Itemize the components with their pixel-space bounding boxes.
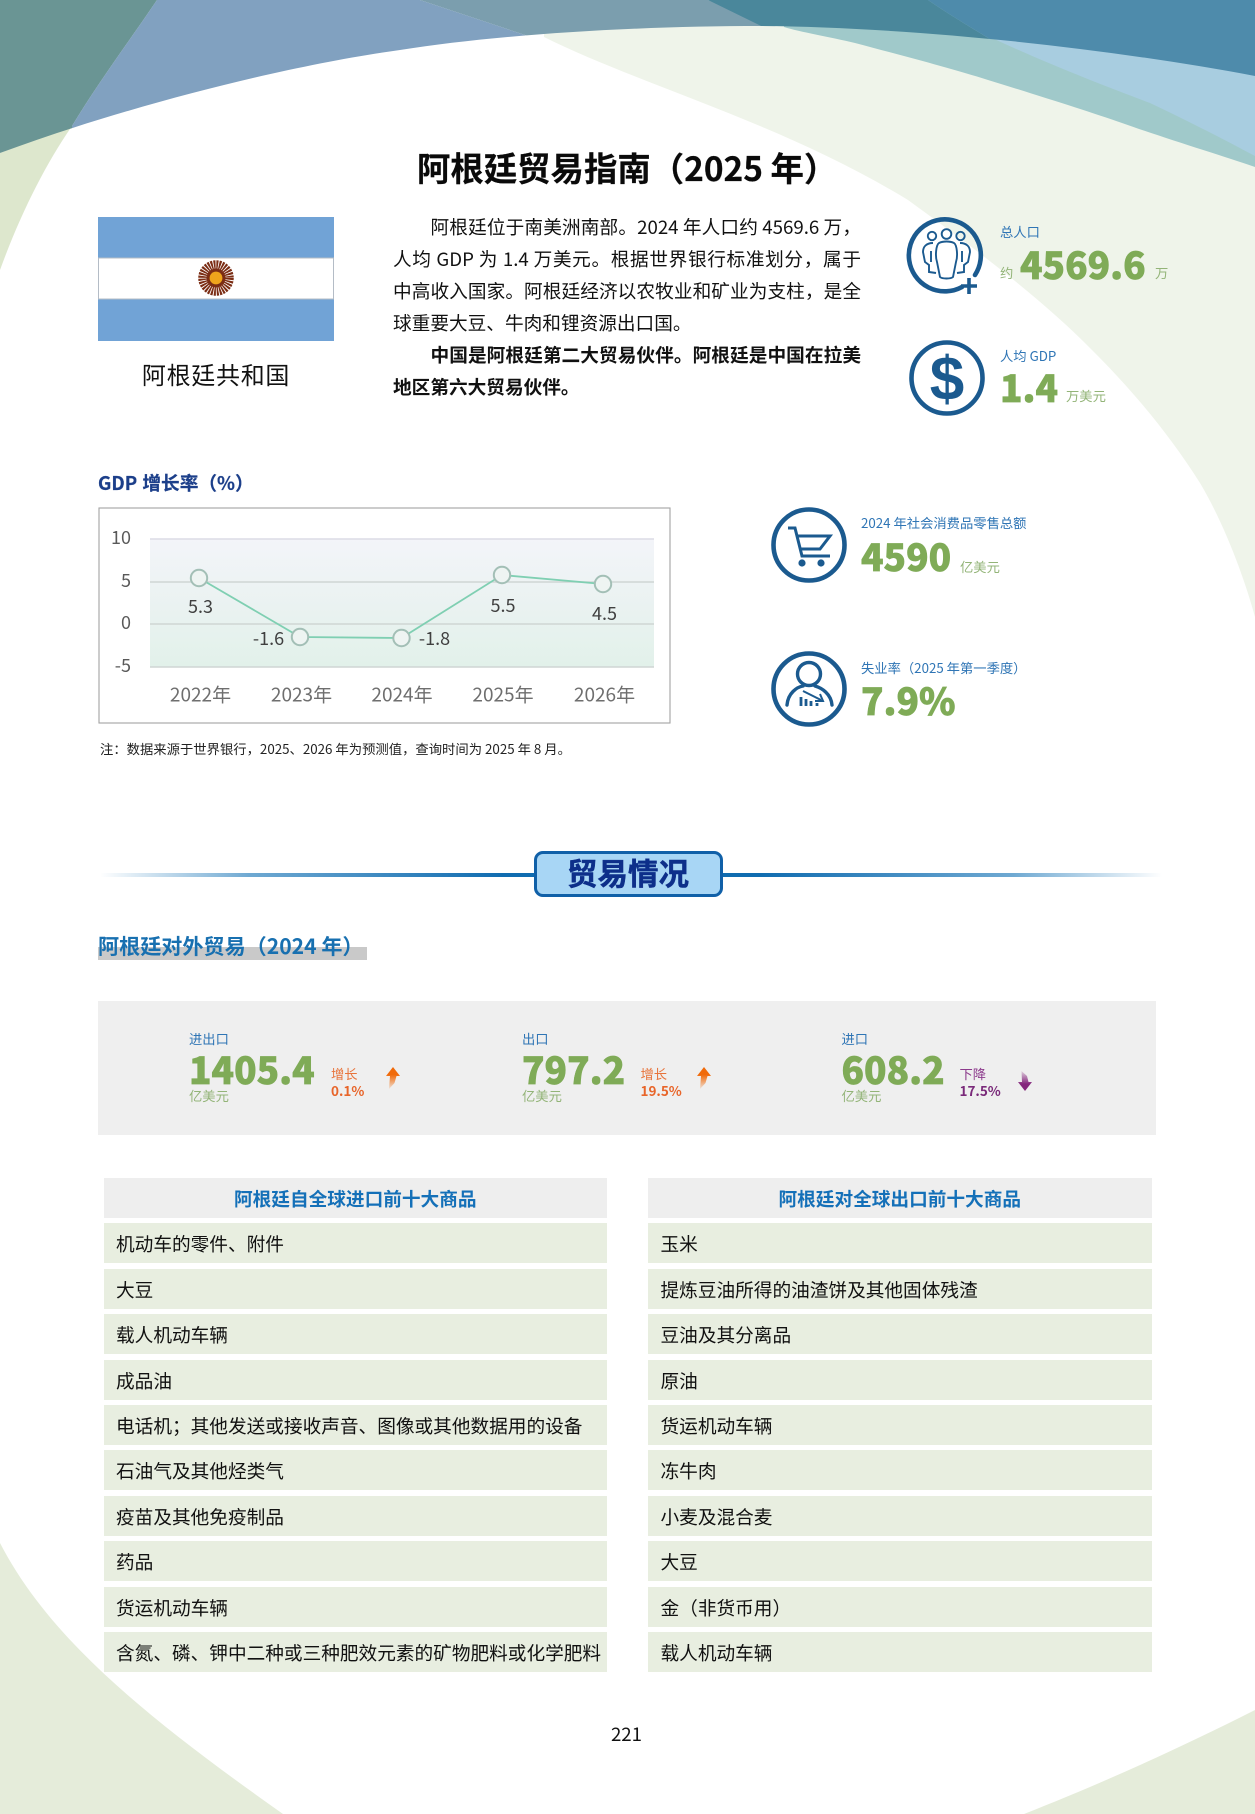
flag caption: 阿根廷共和国	[142, 356, 290, 391]
stat: exports: 出口	[522, 1029, 549, 1048]
row 8	[648, 1541, 1152, 1581]
value: 约	[1000, 262, 1013, 282]
row 8	[104, 1541, 607, 1581]
row 3: 载人机动车辆	[116, 1321, 228, 1348]
line chart: GDP growth: 0	[121, 609, 131, 635]
stat: GDP per capita	[909, 340, 1106, 416]
line chart: GDP growth: 2023年	[271, 680, 332, 708]
row 6: 石油气及其他烃类气	[116, 1457, 284, 1484]
stat: exports: 797.2	[522, 1040, 625, 1094]
line chart: GDP growth: 5.3	[188, 593, 213, 619]
line chart: GDP growth: 5	[121, 567, 131, 593]
row 4	[104, 1360, 607, 1400]
table: top ten imports	[104, 1178, 607, 1672]
row 3	[104, 1314, 607, 1354]
icon: people	[906, 217, 984, 294]
section heading: 贸易情况	[567, 850, 689, 894]
arrow: up	[697, 1067, 711, 1089]
icon: person with falling chart	[771, 651, 847, 727]
stat: total trade	[189, 1029, 400, 1105]
intro text: 中高收入国家。阿根廷经济以农牧业和矿业为支柱，是全	[393, 276, 861, 304]
intro text: 地区第六大贸易伙伴。	[393, 372, 580, 400]
row 9: 货运机动车辆	[116, 1594, 228, 1621]
row 4: 原油	[660, 1367, 698, 1394]
row 1	[104, 1223, 607, 1263]
row 6	[648, 1450, 1152, 1490]
line chart: GDP growth: 5.5	[491, 592, 516, 618]
stat: retail sales	[771, 507, 1026, 583]
section heading	[534, 851, 722, 897]
label: 2024 年社会消费品零售总额	[861, 513, 1026, 532]
row 10: 含氮、磷、钾中二种或三种肥效元素的矿物肥料或化学肥料	[116, 1639, 601, 1666]
icon: dollar	[909, 340, 985, 416]
row 8: 大豆	[660, 1548, 698, 1575]
section divider: trade situation	[108, 850, 1154, 897]
label: 人均 GDP	[1000, 346, 1056, 365]
stat: total trade: 亿美元	[189, 1086, 229, 1105]
row 5	[648, 1405, 1152, 1445]
intro text: 中国是阿根廷第二大贸易伙伴。阿根廷是中国在拉美	[430, 340, 861, 368]
row 2	[648, 1269, 1152, 1309]
value: 4590	[861, 528, 951, 582]
row 9	[104, 1587, 607, 1627]
stat: imports: 下降	[960, 1064, 986, 1083]
intro text: 球重要大豆、牛肉和锂资源出口国。	[393, 308, 692, 336]
line chart: GDP growth: -5	[115, 652, 131, 678]
value: 7.9%	[861, 672, 956, 726]
row 7: 疫苗及其他免疫制品	[116, 1503, 284, 1530]
table header	[648, 1178, 1152, 1218]
value: 万	[1155, 262, 1168, 282]
stat: total trade: 增长	[331, 1064, 358, 1083]
stat: exports: 19.5%	[640, 1080, 682, 1100]
flag of Argentina	[98, 217, 334, 341]
row 5	[104, 1405, 607, 1445]
line chart: GDP growth: 10	[111, 524, 131, 550]
line chart: GDP growth: 2025年	[472, 680, 534, 708]
stat: exports	[522, 1029, 711, 1105]
stat: total trade: 1405.4	[189, 1040, 315, 1094]
row 7: 小麦及混合麦	[660, 1503, 772, 1530]
page number: 221	[611, 1720, 642, 1747]
table: top ten exports	[648, 1178, 1152, 1672]
row 4	[648, 1360, 1152, 1400]
row 2: 提炼豆油所得的油渣饼及其他固体残渣	[660, 1276, 978, 1303]
row 7	[104, 1496, 607, 1536]
chart note: 注：数据来源于世界银行，2025、2026 年为预测值，查询时间为 2025 年 8 月。	[100, 739, 571, 758]
row 10	[648, 1632, 1152, 1672]
row 8: 药品	[116, 1548, 153, 1575]
unit: 亿美元	[960, 557, 1000, 576]
stat: imports: 608.2	[842, 1040, 945, 1094]
intro text: 阿根廷位于南美洲南部。2024 年人口约 4569.6 万，	[430, 212, 861, 240]
row 9	[648, 1587, 1152, 1627]
row 5: 货运机动车辆	[660, 1412, 772, 1439]
line chart: GDP growth	[98, 507, 671, 724]
label: 失业率（2025 年第一季度）	[861, 658, 1026, 677]
chart heading: GDP 增长率（%）	[98, 469, 254, 496]
value: 4569.6	[1020, 236, 1146, 290]
label: 总人口	[1000, 222, 1040, 241]
table header: 阿根廷对全球出口前十大商品	[778, 1185, 1021, 1212]
row 10	[104, 1632, 607, 1672]
panel: trade totals	[98, 1001, 1156, 1135]
unit: 万美元	[1066, 386, 1106, 405]
stat: unemployment rate	[771, 651, 1026, 727]
line chart: GDP growth: 2026年	[574, 680, 635, 708]
intro text	[393, 212, 861, 400]
line chart: GDP growth: -1.8	[419, 625, 450, 651]
line chart: GDP growth: 2024年	[371, 680, 433, 708]
row 1	[648, 1223, 1152, 1263]
row 7	[648, 1496, 1152, 1536]
stat: total population	[906, 217, 1168, 294]
stat: exports: 亿美元	[522, 1086, 562, 1105]
row 5: 电话机；其他发送或接收声音、图像或其他数据用的设备	[116, 1412, 582, 1439]
row 6: 冻牛肉	[660, 1457, 716, 1484]
table header: 阿根廷自全球进口前十大商品	[234, 1185, 477, 1212]
row 4: 成品油	[116, 1367, 172, 1394]
row 1: 玉米	[660, 1230, 698, 1257]
stat: imports: 17.5%	[960, 1080, 1001, 1100]
row 2: 大豆	[116, 1276, 153, 1303]
intro text: 人均 GDP 为 1.4 万美元。根据世界银行标准划分，属于	[393, 244, 861, 272]
stat: imports	[842, 1029, 1032, 1105]
row 9: 金（非货币用）	[660, 1594, 791, 1621]
title: 阿根廷贸易指南（2025 年）	[417, 142, 837, 191]
stat: imports: 进口	[842, 1029, 868, 1048]
subheading: foreign trade: 阿根廷对外贸易（2024 年）	[98, 931, 364, 961]
row 1: 机动车的零件、附件	[116, 1230, 284, 1257]
row 6	[104, 1450, 607, 1490]
arrow: up	[386, 1067, 400, 1089]
stat: total trade: 0.1%	[331, 1080, 364, 1100]
row 10: 载人机动车辆	[660, 1639, 772, 1666]
table header	[104, 1178, 607, 1218]
row 3: 豆油及其分离品	[660, 1321, 791, 1348]
stat: exports: 增长	[640, 1064, 667, 1083]
icon: shopping cart	[771, 507, 847, 583]
icon: dollar: $	[930, 345, 964, 414]
line chart: GDP growth: -1.6	[253, 625, 284, 651]
row 2	[104, 1269, 607, 1309]
arrow: down	[1018, 1071, 1032, 1091]
row 3	[648, 1314, 1152, 1354]
stat: imports: 亿美元	[842, 1086, 881, 1105]
stat: total trade: 进出口	[189, 1029, 229, 1048]
line chart: GDP growth: 2022年	[170, 680, 231, 708]
value: 1.4	[1000, 358, 1058, 412]
line chart: GDP growth: 4.5	[592, 600, 617, 626]
